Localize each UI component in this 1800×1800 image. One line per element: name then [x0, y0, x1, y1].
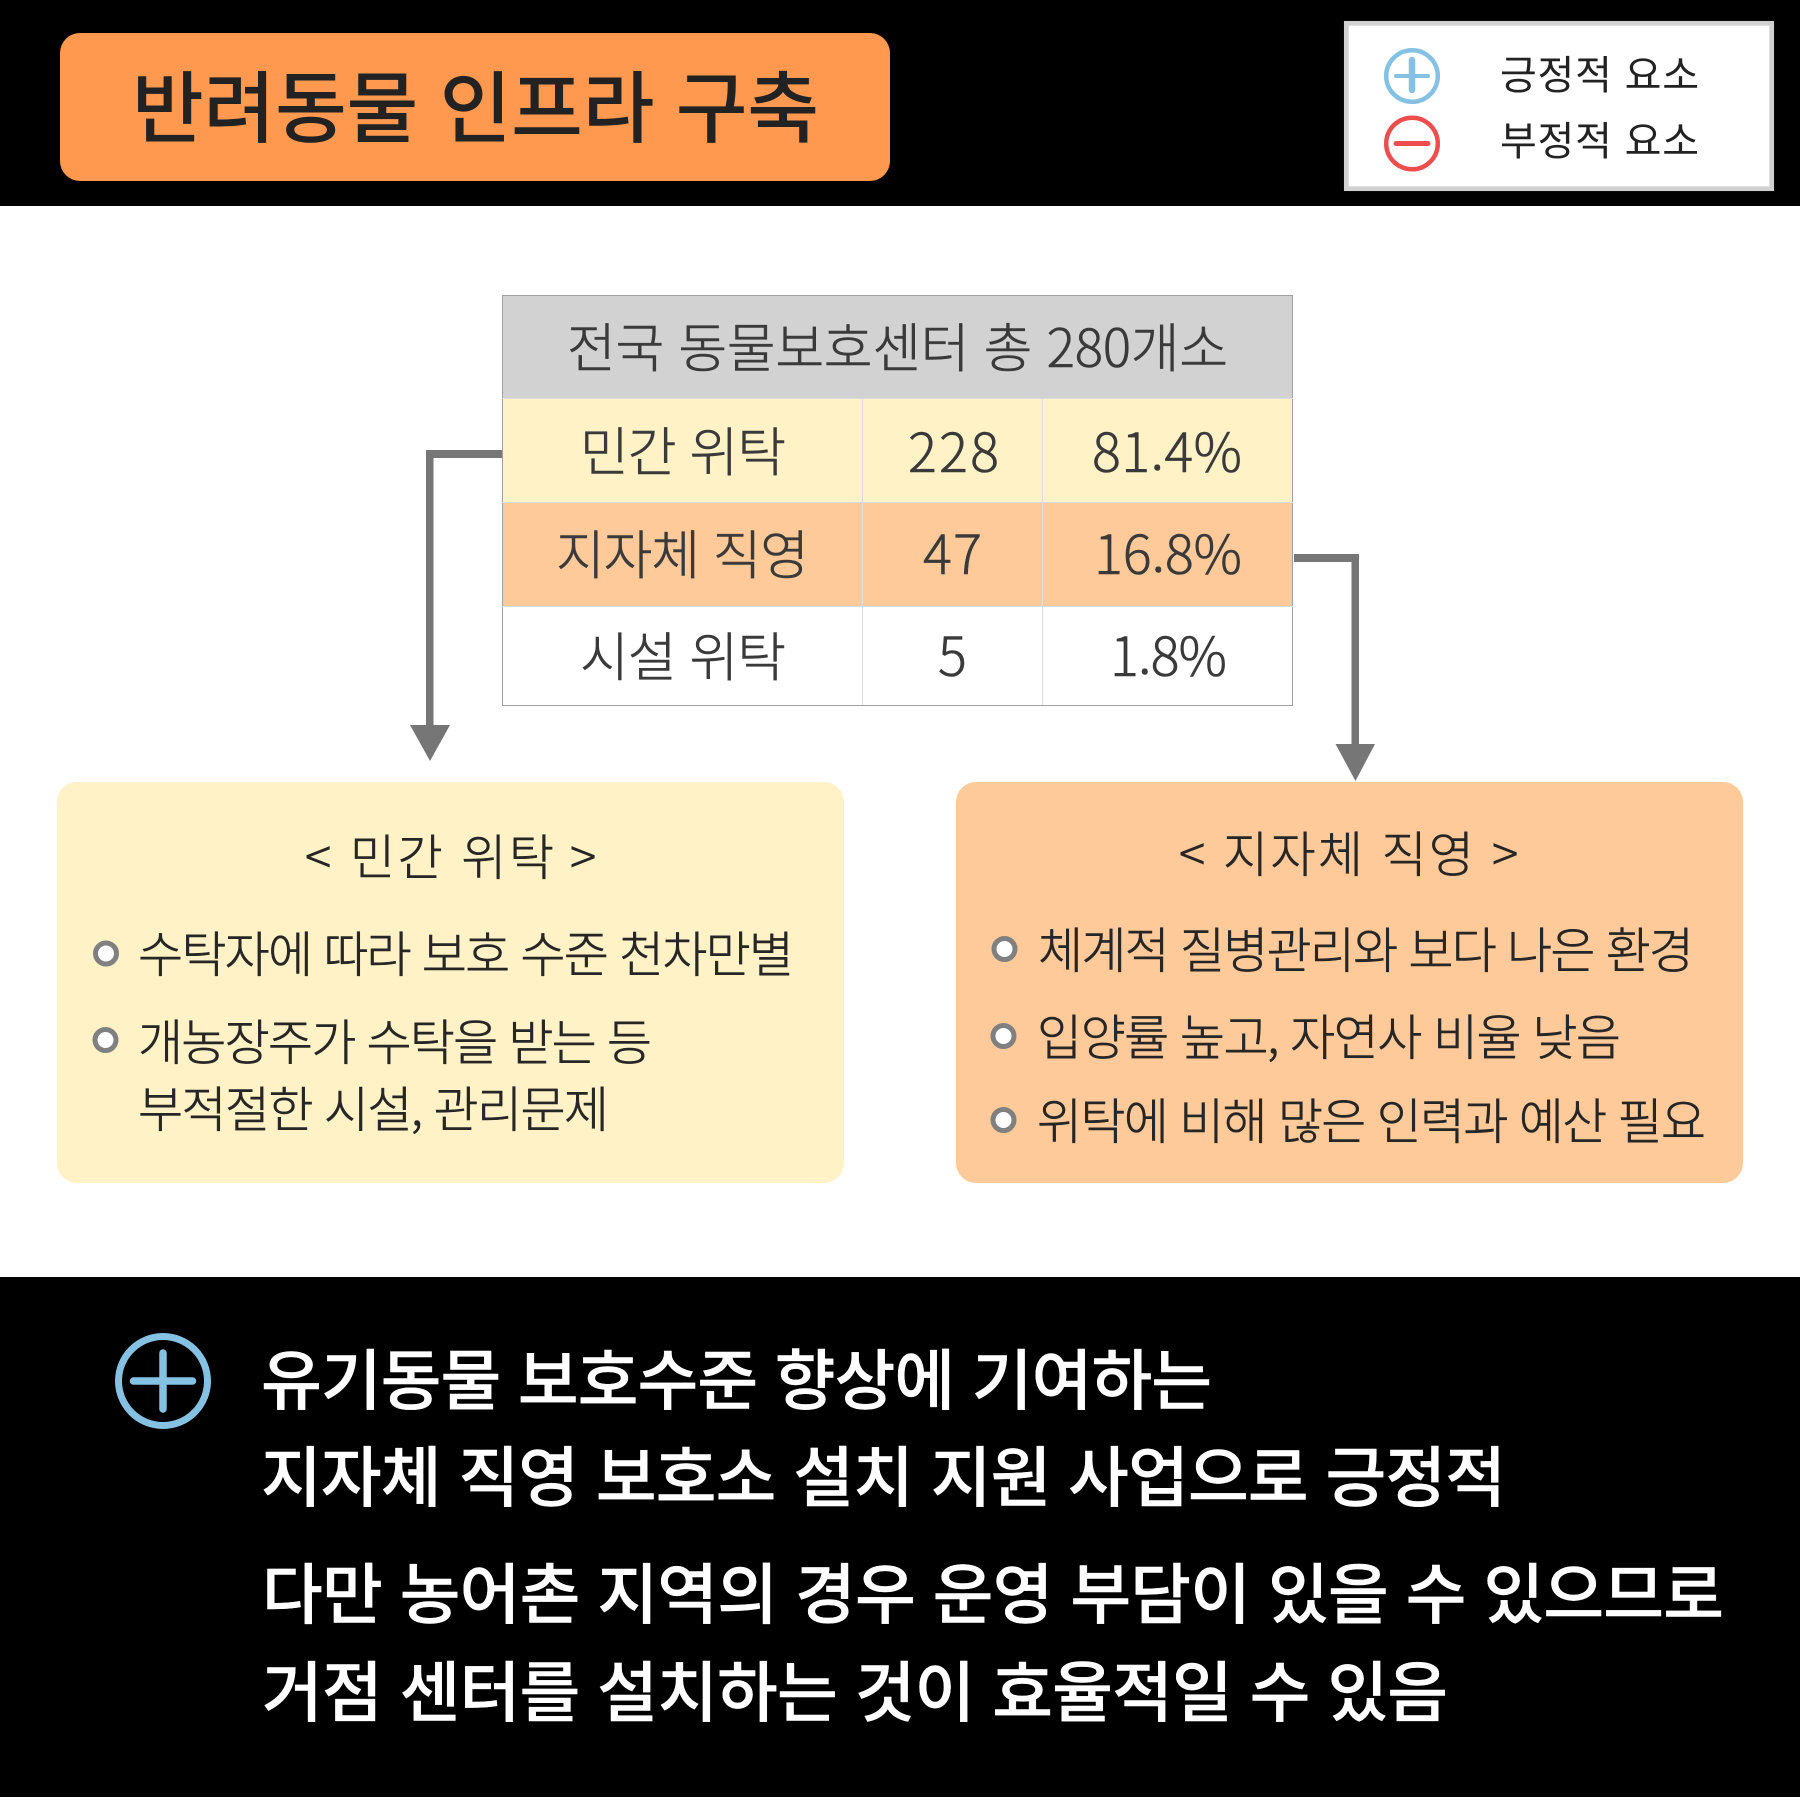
bullet 2: 입양률 높고, 자연사 비율 낮음 — [1037, 999, 1621, 1070]
legend labels: 긍정적 요소 — [1500, 43, 1699, 101]
bullet 2: 개농장주가 수탁을 받는 등 — [138, 1004, 652, 1075]
table header: 전국 동물보호센터 총 280개소 — [567, 307, 1228, 383]
bullet 3: 위탁에 비해 많은 인력과 예산 필요 — [1037, 1083, 1706, 1154]
arrow: left — [410, 450, 502, 761]
header band — [0, 0, 1800, 206]
row: 지자체 직영: 16.8% — [1094, 511, 1242, 590]
conclusion text — [261, 1328, 1724, 1736]
icon: plus large — [118, 1336, 208, 1426]
legend labels: 부정적 요소 — [1500, 109, 1699, 167]
row: 시설 위탁: 1.8% — [1110, 613, 1227, 692]
row: 지자체 직영: 지자체 직영 — [556, 514, 809, 590]
row: 시설 위탁: 시설 위탁 — [580, 616, 786, 692]
conclusion text: 유기동물 보호수준 향상에 기여하는 — [261, 1328, 1212, 1424]
panel heading: < — [305, 819, 331, 890]
legend — [1346, 23, 1772, 189]
legend labels — [1500, 43, 1699, 167]
row: 시설 위탁: 5 — [938, 613, 967, 692]
row: 민간 위탁: 81.4% — [1092, 409, 1242, 488]
bullet 1: 수탁자에 따라 보호 수준 천차만별 — [138, 916, 794, 987]
icon: minus — [1386, 118, 1438, 169]
panel heading: 민간 위탁 — [350, 819, 554, 890]
row: 민간 위탁: 민간 위탁 — [580, 411, 786, 487]
row: 지자체 직영: 47 — [923, 511, 982, 590]
bullet 2 — [95, 1004, 652, 1142]
panel: 지자체 직영 — [956, 782, 1743, 1183]
row: 지자체 직영 — [502, 503, 1293, 606]
title: 반려동물 인프라 구축 — [132, 47, 819, 159]
row: 민간 위탁: 228 — [908, 409, 999, 488]
row: 민간 위탁 — [502, 399, 1293, 502]
bullet 2: 부적절한 시설, 관리문제 — [138, 1071, 609, 1142]
table — [502, 295, 1293, 706]
panel heading: < — [1179, 816, 1205, 887]
icon: plus — [1386, 50, 1438, 102]
conclusion band — [0, 1277, 1800, 1797]
table header — [502, 295, 1293, 399]
panel heading: > — [570, 819, 596, 890]
conclusion text: 거점 센터를 설치하는 것이 효율적일 수 있음 — [262, 1640, 1448, 1736]
conclusion text: 지자체 직영 보호소 설치 지원 사업으로 긍정적 — [261, 1425, 1506, 1521]
row: 시설 위탁 — [502, 607, 1293, 705]
bullet 1: 체계적 질병관리와 보다 나은 환경 — [1038, 912, 1694, 983]
arrow: right — [1294, 554, 1375, 781]
panel heading: > — [1492, 816, 1518, 887]
conclusion text: 다만 농어촌 지역의 경우 운영 부담이 있을 수 있으므로 — [262, 1542, 1724, 1638]
panel heading: 지자체 직영 — [1223, 816, 1474, 887]
title — [60, 33, 890, 181]
panel: 민간 위탁 — [57, 782, 844, 1183]
